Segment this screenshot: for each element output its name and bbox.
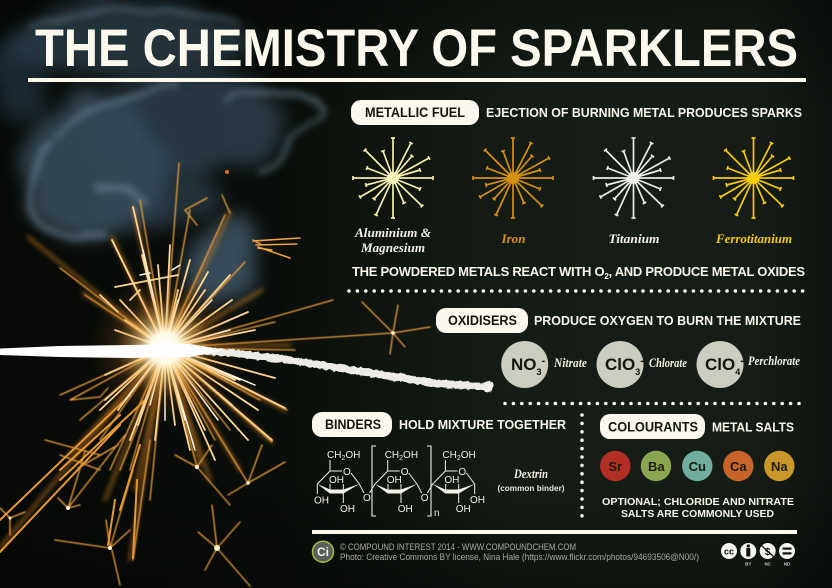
oxidisers pill (436, 308, 528, 333)
nitrate circle: NO (511, 355, 536, 374)
divider dots (349, 291, 806, 520)
colourants note: SALTS ARE COMMONLY USED (621, 508, 774, 520)
nitrate label: Nitrate (553, 355, 587, 370)
colourants note: OPTIONAL; CHLORIDE AND NITRATE (602, 496, 794, 508)
oxidisers heading: PRODUCE OXYGEN TO BURN THE MIXTURE (534, 313, 801, 328)
chemical structure: dextrin (314, 446, 485, 519)
ring wedges (317, 484, 475, 494)
orange spark rays (0, 163, 430, 586)
structure labels: CH (385, 450, 399, 461)
footer (312, 541, 795, 566)
label: aluminium and magnesium: Aluminium & (354, 225, 431, 240)
brackets (372, 446, 431, 516)
pale bright spark rays (100, 207, 285, 460)
perchlorate circle: 4 (735, 367, 740, 377)
structure labels: OH (314, 496, 329, 506)
label: titanium: Titanium (608, 231, 660, 246)
structure labels: CH (327, 450, 341, 461)
structure labels: OH (456, 504, 471, 515)
colourants pill: COLOURANTS (608, 420, 698, 434)
structure labels: O (363, 493, 371, 504)
structure labels: 2 (341, 455, 345, 462)
structure labels: 2 (457, 455, 461, 462)
chlorate label: Chlorate (649, 355, 687, 370)
smoke clouds (0, 2, 322, 310)
label: aluminium and magnesium: Magnesium (360, 240, 425, 255)
element: barium: Ba (648, 459, 665, 474)
perchlorate circle (696, 341, 744, 388)
element: copper (682, 451, 712, 481)
licence icons (721, 543, 795, 566)
binders pill: BINDERS (325, 417, 381, 432)
icon: compound interest logo (312, 541, 334, 562)
structure labels: CH (442, 450, 457, 461)
icon: compound interest logo: Ci (317, 545, 329, 559)
footer rule (312, 530, 797, 534)
element: copper: Cu (689, 459, 706, 474)
icon: ferrotitanium spark (714, 138, 794, 218)
icon: nc (760, 543, 776, 566)
structure labels: OH (340, 504, 355, 515)
element: sodium (764, 451, 794, 481)
structure labels: OH (329, 475, 344, 486)
structure labels: 2 (399, 455, 403, 462)
icon: nc: $ (765, 547, 771, 558)
binders pill (312, 412, 392, 437)
sparkler rod: glowing section (0, 344, 225, 358)
spark halo (0, 207, 290, 560)
structure labels: O (401, 467, 409, 478)
element: calcium (723, 451, 754, 481)
metal oxides statement: 2 (604, 272, 609, 281)
element: strontium: Sr (608, 459, 622, 474)
oxidisers pill: OXIDISERS (448, 313, 517, 328)
colourants note (602, 496, 794, 520)
structure labels: OH (403, 450, 418, 461)
icon: aluminium and magnesium spark (353, 138, 433, 218)
bold lower-left sparks (0, 395, 145, 558)
central glow (90, 273, 240, 423)
structure labels: O (421, 493, 429, 504)
structure labels: OH (470, 495, 485, 506)
structure labels: OH (461, 450, 476, 461)
perchlorate circle: ClO (705, 355, 735, 374)
metallic fuel heading: EJECTION OF BURNING METAL PRODUCES SPARKS (486, 105, 802, 120)
metal oxides statement: THE POWDERED METALS REACT WITH O (352, 264, 605, 279)
dextrin label (498, 466, 565, 493)
sparkler rod: burnt rough section (190, 350, 494, 392)
white spark streaks (125, 250, 255, 450)
nitrate circle (501, 341, 548, 388)
spark point highlights (8, 170, 395, 551)
element: calcium: Ca (730, 459, 747, 474)
colourants pill (600, 414, 705, 439)
nitrate circle: - (542, 355, 546, 367)
icon: titanium spark (594, 138, 674, 218)
element: sodium: Na (771, 459, 788, 474)
structure labels (314, 450, 485, 519)
structure labels: OH (345, 450, 360, 461)
sparkler burst (0, 163, 430, 586)
panel: metallic fuel (351, 100, 805, 281)
chlorate circle (596, 341, 644, 388)
label: iron: Iron (500, 231, 526, 246)
dextrin label: (common binder) (498, 484, 565, 493)
credit text (340, 542, 699, 563)
structure labels: OH (398, 504, 413, 515)
binders heading: HOLD MIXTURE TOGETHER (399, 417, 567, 432)
structure labels: O (343, 467, 351, 478)
colourants heading: METAL SALTS (712, 420, 794, 434)
perchlorate circle: - (740, 355, 744, 367)
chlorate circle: - (640, 355, 644, 367)
icon: iron spark (473, 138, 553, 218)
element: barium (641, 451, 671, 481)
structure labels: O (458, 467, 466, 478)
perchlorate label: Perchlorate (748, 353, 800, 368)
metallic fuel pill (351, 100, 479, 125)
dextrin label: Dextrin (513, 466, 548, 481)
chlorate circle: 3 (635, 367, 640, 377)
metallic fuel pill: METALLIC FUEL (365, 105, 465, 120)
icon: nc: NC (764, 562, 772, 566)
structure labels: n (434, 508, 440, 519)
label: aluminium and magnesium (354, 225, 431, 255)
chlorate circle: ClO (605, 355, 635, 374)
ring bonds (317, 460, 475, 503)
element: strontium (600, 451, 630, 481)
title rule (28, 78, 806, 82)
nitrate circle: 3 (536, 367, 542, 377)
icon: by: BY (745, 562, 751, 566)
credit text: © COMPOUND INTEREST 2014 - WWW.COMPOUNDCHEM.COM (340, 542, 576, 553)
distant spark cluster (253, 238, 300, 258)
metal oxides statement: , AND PRODUCE METAL OXIDES (608, 264, 805, 279)
panel: colourants (600, 414, 794, 520)
credit text: Photo: Creative Commons BY license, Nina Hale (https://www.flickr.com/photos/94693506@N00/) (340, 552, 699, 563)
icon: cc: cc (724, 546, 734, 556)
structure labels: OH (444, 475, 459, 486)
icon: nd: ND (784, 562, 791, 566)
panel: binders (312, 412, 567, 519)
label: ferrotitanium: Ferrotitanium (715, 231, 792, 246)
panel: oxidisers (436, 308, 801, 388)
structure labels: OH (387, 475, 402, 486)
